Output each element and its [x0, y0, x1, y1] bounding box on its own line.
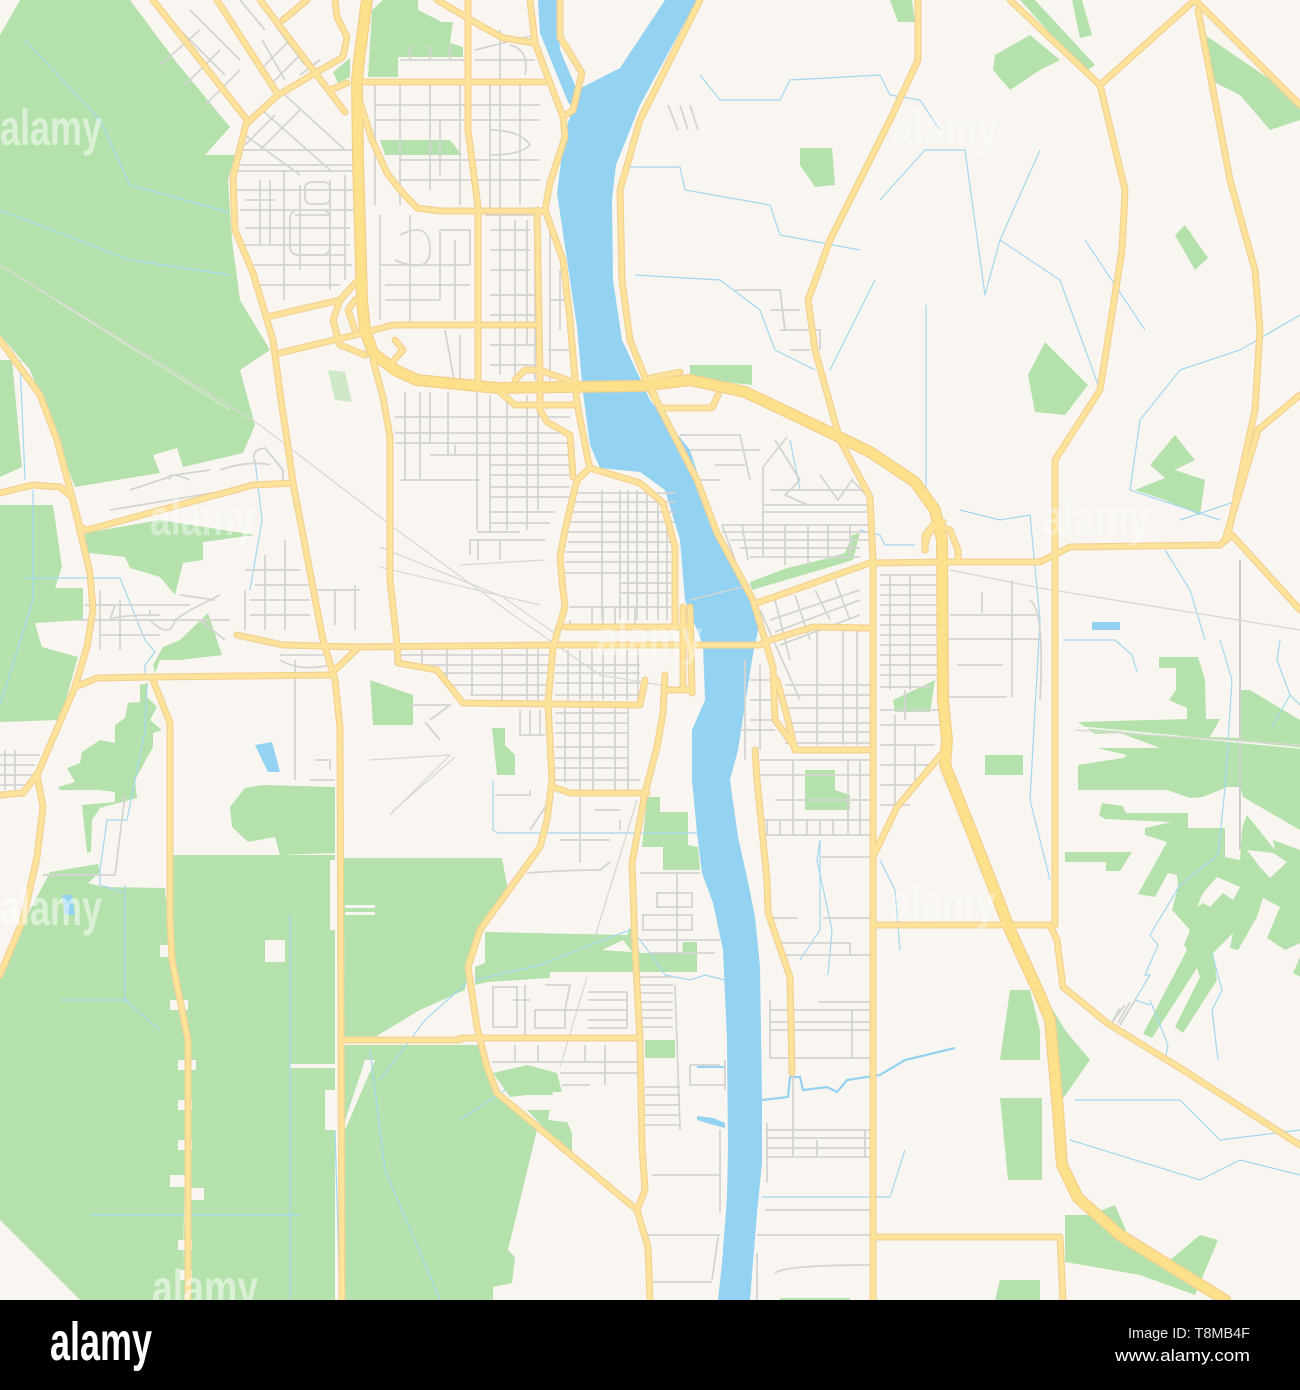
boat channel	[697, 1066, 725, 1068]
railway through eastern forest	[1080, 727, 1300, 748]
watermarks: alamy	[890, 875, 996, 931]
small lakes	[62, 622, 1120, 1128]
forest clearings	[0, 588, 1287, 1300]
watermarks: alamy	[597, 610, 702, 666]
watermarks: alamy	[0, 880, 102, 936]
watermarks: alamy	[152, 1260, 258, 1316]
image id: Image ID: T8MB4F	[1128, 1325, 1250, 1342]
watermarks: alamy	[150, 490, 255, 546]
river	[538, 0, 762, 1300]
creek	[762, 1048, 955, 1100]
watermarks: alamy	[0, 100, 102, 156]
footer bar	[0, 1300, 1300, 1390]
website: www.alamy.com	[1114, 1346, 1250, 1365]
railway lines	[0, 265, 1300, 1067]
watermarks: alamy	[1043, 490, 1149, 546]
watermarks: alamy	[892, 100, 998, 156]
watermarks	[0, 100, 1149, 1316]
footer logo: alamy	[50, 1312, 152, 1372]
